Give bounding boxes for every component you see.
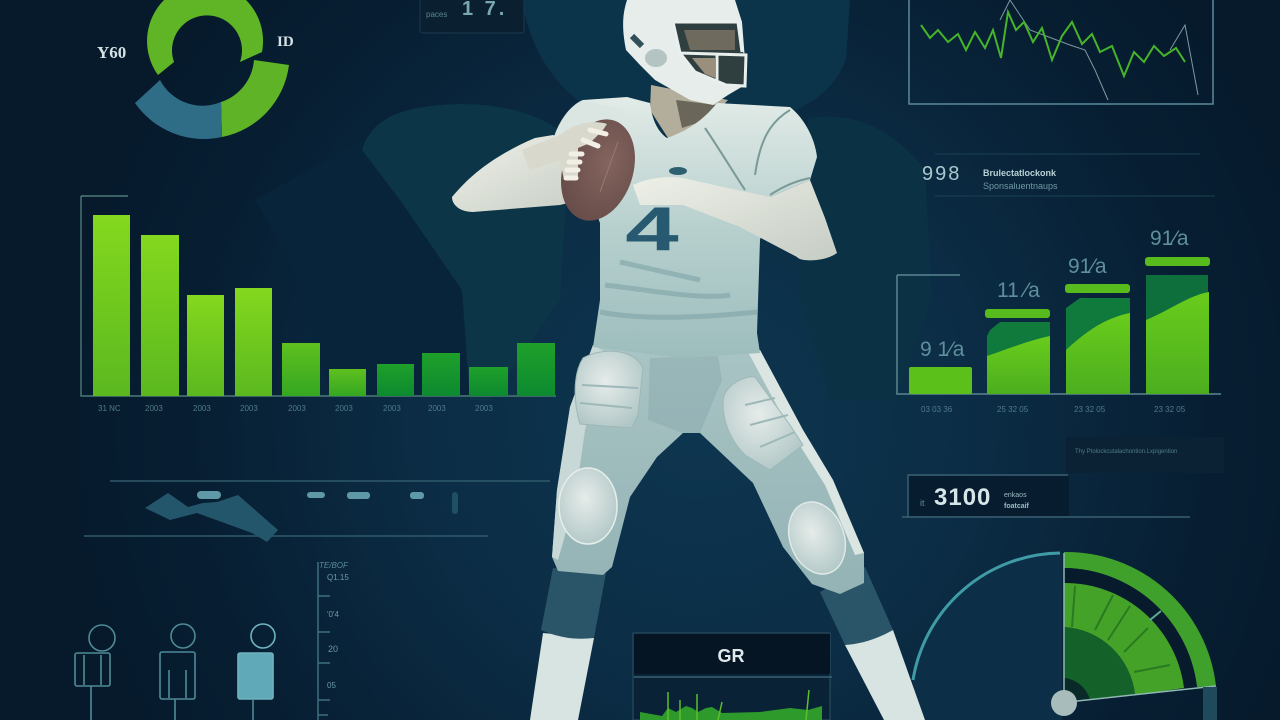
bar labels: 2003 xyxy=(475,404,493,413)
top ring segment xyxy=(147,0,263,75)
donut label right: ID xyxy=(277,34,294,50)
bar 3: 91⁄a xyxy=(1068,255,1107,278)
helmet shell xyxy=(623,0,745,105)
left knee pad xyxy=(559,468,617,544)
bar labels: 2003 xyxy=(428,404,446,413)
right heading row: Sponsaluentnaups xyxy=(983,181,1058,191)
axes xyxy=(897,275,1221,394)
inner dark green wedge xyxy=(1064,627,1135,700)
person icons xyxy=(75,624,275,720)
bottom GR panel: GR xyxy=(718,646,745,666)
bar labels: 2003 xyxy=(145,404,163,413)
note box xyxy=(1066,437,1224,473)
bar 2: 11 ⁄a xyxy=(997,279,1040,302)
stat box 3100: it xyxy=(920,498,925,508)
note box: Thy Ptolockcutalachontion.Lxpigention xyxy=(1075,449,1177,455)
facemask xyxy=(673,22,746,86)
gauge hub xyxy=(1051,690,1077,716)
grey spike line xyxy=(1000,0,1198,100)
top right line chart xyxy=(909,0,1213,104)
gripping hand and fingers xyxy=(522,122,607,180)
shin sleeves xyxy=(541,567,893,645)
stat box 3100: 3100 xyxy=(934,484,991,511)
stat box 3100: enkaos xyxy=(1004,492,1027,499)
bottom GR panel xyxy=(633,633,832,720)
left quarter dial xyxy=(913,553,1062,720)
bar labels xyxy=(98,404,493,413)
donut chart xyxy=(97,0,294,139)
needles xyxy=(1064,553,1216,702)
segmented mid band xyxy=(1064,583,1184,695)
throwing arm xyxy=(452,135,600,212)
football xyxy=(549,110,647,230)
jersey torso xyxy=(570,97,817,358)
bar labels: 2003 xyxy=(335,404,353,413)
dark band xyxy=(1064,568,1197,688)
helmet ear detail xyxy=(645,49,667,67)
jersey number: 4 xyxy=(625,195,679,264)
bar labels: 2003 xyxy=(240,404,258,413)
mid-left terrain chart xyxy=(84,481,550,542)
icon: filled person 3 xyxy=(238,624,275,720)
axes xyxy=(81,196,556,396)
lower green segment xyxy=(221,60,289,137)
vertical scale: TE/BOF xyxy=(319,561,349,570)
supporting arm xyxy=(633,177,837,260)
outer green band xyxy=(1064,552,1216,687)
bar labels: 25 32 05 xyxy=(997,405,1029,414)
left thigh pad xyxy=(575,351,643,428)
bar labels xyxy=(921,405,1186,414)
green mini chart xyxy=(640,706,822,720)
vertical scale: Q1.15 xyxy=(327,573,349,582)
bar 4: 91⁄a xyxy=(1150,227,1189,250)
neck xyxy=(650,85,728,138)
bar 4 xyxy=(1145,227,1210,394)
small top stat panel xyxy=(420,0,524,33)
markers xyxy=(197,491,458,514)
player illustration xyxy=(452,0,925,720)
heading number: 998 xyxy=(922,163,961,185)
socks xyxy=(530,630,925,720)
gauge xyxy=(913,552,1217,720)
left bar chart xyxy=(81,196,556,413)
bar labels: 23 32 05 xyxy=(1154,405,1186,414)
heading text: Brulectatlockonk xyxy=(983,168,1057,178)
bar 3 xyxy=(1065,255,1130,394)
green line xyxy=(921,12,1185,76)
face opening xyxy=(673,22,746,86)
background silhouette of player xyxy=(255,0,932,400)
bar labels: 03 03 36 xyxy=(921,405,953,414)
bars xyxy=(93,215,130,396)
vertical scale: 20 xyxy=(328,644,338,654)
icon: outline person 2 xyxy=(160,624,195,720)
pants xyxy=(552,345,864,594)
bar labels: 31 NC xyxy=(98,404,121,413)
stat box 3100: foatcaif xyxy=(1004,503,1030,510)
bar labels: 2003 xyxy=(383,404,401,413)
icon: outline person 1 xyxy=(75,625,115,720)
bar labels: 23 32 05 xyxy=(1074,405,1106,414)
bar labels: 2003 xyxy=(288,404,306,413)
bar 1: 9 1⁄a xyxy=(920,338,965,361)
right growth bar chart xyxy=(897,227,1221,414)
vertical scale: 05 xyxy=(327,681,336,690)
donut label left: Y60 xyxy=(97,43,126,62)
vertical scale xyxy=(318,561,349,720)
right knee pad xyxy=(779,494,855,582)
chest badge xyxy=(669,167,687,175)
panel header xyxy=(634,634,830,674)
vertical scale: '0'4 xyxy=(327,610,340,619)
bar 2 xyxy=(985,279,1050,394)
right heading row xyxy=(922,154,1215,196)
lower blue segment xyxy=(135,80,222,139)
right thigh pad xyxy=(723,377,803,470)
small top stat panel: paces xyxy=(426,10,447,19)
bar 1 xyxy=(909,338,972,394)
terrain shape xyxy=(145,493,278,542)
bar labels: 2003 xyxy=(193,404,211,413)
stat box 3100 xyxy=(902,475,1190,517)
